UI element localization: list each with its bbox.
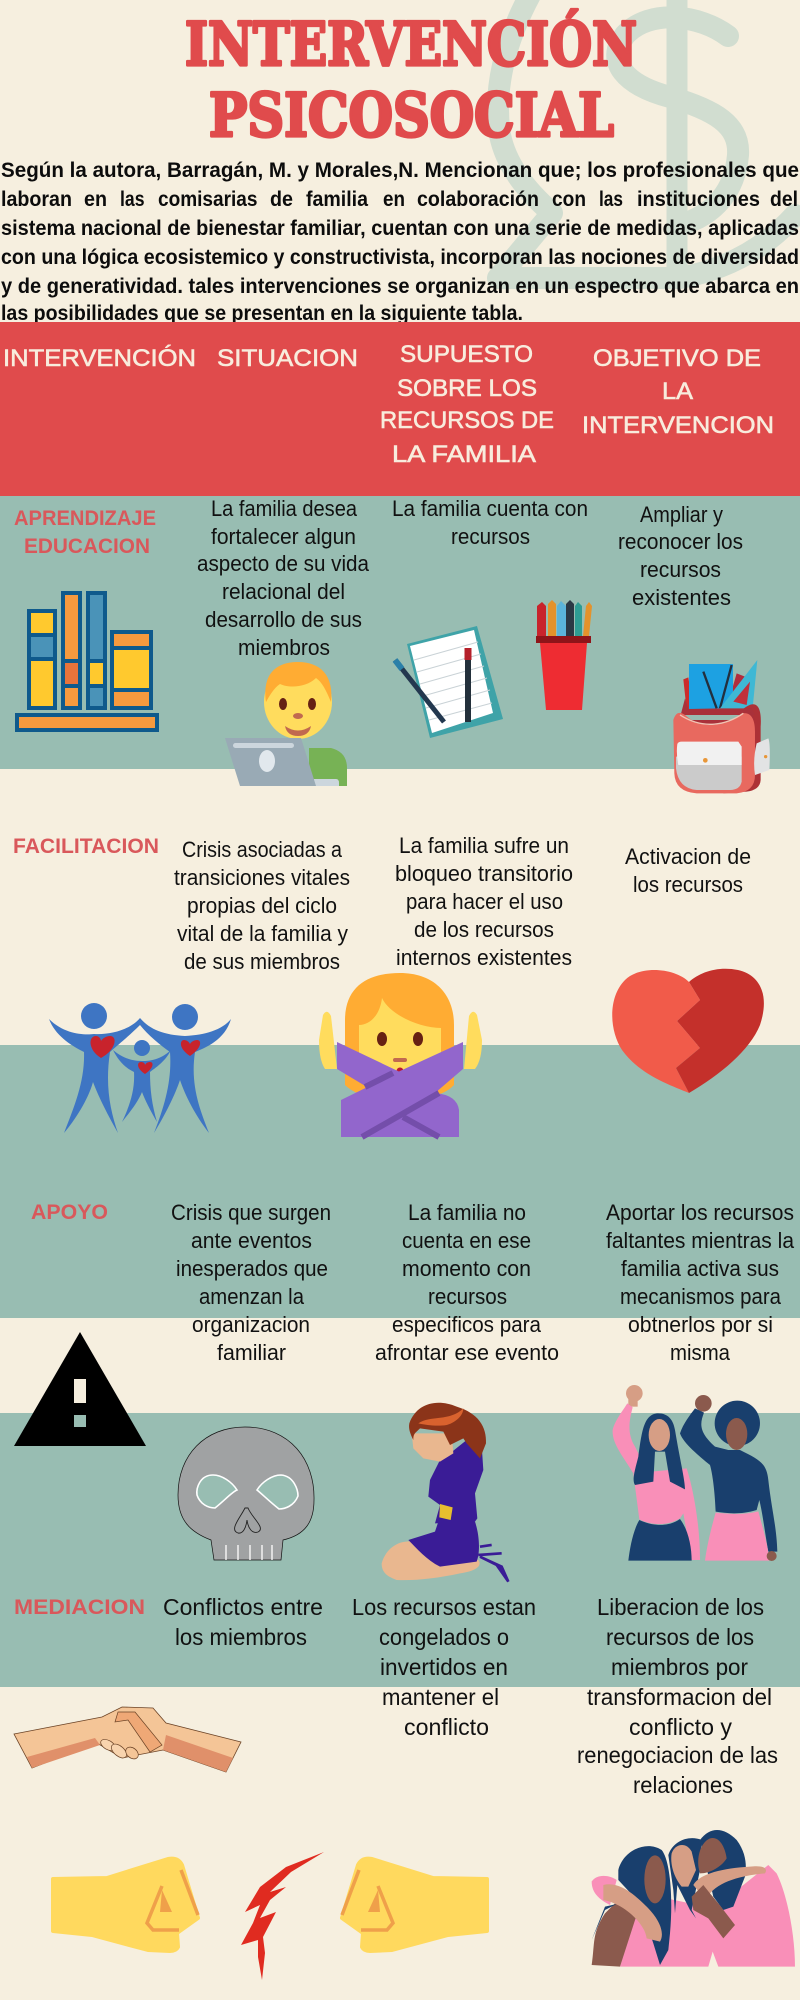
icon: women raising fists (613, 1385, 777, 1561)
icon: family with hearts (49, 1003, 231, 1133)
icon: pencil cup (536, 600, 592, 710)
text: supuesto aprendizaje: recursos (451, 524, 530, 549)
text: situacion mediacion: los miembros (175, 1624, 307, 1650)
text: supuesto mediacion: invertidos en (380, 1654, 508, 1680)
text: objetivo aprendizaje: reconocer los (618, 529, 743, 554)
icon: pale dollar sign background (498, 0, 795, 278)
text: situacion aprendizaje: aspecto de su vida (197, 551, 370, 576)
text: objetivo apoyo (606, 1200, 795, 1365)
text: situacion aprendizaje: fortalecer algun (211, 524, 356, 549)
intro paragraph: colaboración (417, 188, 539, 211)
text: situacion apoyo: ante eventos (191, 1228, 312, 1253)
panel: aprendizaje (14, 496, 770, 793)
text: objetivo facilitacion: Activacion de (625, 844, 751, 869)
text: situacion apoyo: organizacion (192, 1312, 310, 1337)
icon: warning triangle (14, 1332, 146, 1446)
text: objetivo mediacion: miembros por (611, 1654, 748, 1680)
header: situacion: SITUACION (217, 345, 358, 372)
header: objetivo: OBJETIVO DE (593, 345, 761, 372)
icon: women embracing (592, 1830, 795, 1967)
panel: mediacion (14, 1594, 795, 1980)
header: objetivo (582, 345, 774, 439)
title (185, 9, 637, 151)
text: situacion aprendizaje: miembros (238, 635, 330, 660)
text: supuesto mediacion: Los recursos estan (352, 1594, 536, 1620)
text: objetivo apoyo: mecanismos para (620, 1284, 782, 1309)
text: objetivo facilitacion (625, 844, 751, 897)
header: objetivo: LA (662, 378, 693, 405)
text: situacion facilitacion: transiciones vitales (174, 865, 350, 890)
text: objetivo apoyo: misma (670, 1340, 731, 1365)
label: aprendizaje educacion (14, 506, 156, 558)
text: supuesto mediacion: mantener el (382, 1684, 499, 1710)
header: supuesto: SUPUESTO (400, 341, 533, 368)
text: supuesto facilitacion: La familia sufre un (399, 833, 569, 858)
intro paragraph: las (599, 188, 623, 211)
text: objetivo mediacion: conflicto y (629, 1714, 733, 1740)
icon: right fist (342, 1859, 487, 1951)
text: objetivo apoyo: faltantes mientras la (606, 1228, 795, 1253)
text: objetivo mediacion: renegociacion de las (577, 1742, 778, 1768)
text: supuesto facilitacion (395, 833, 573, 970)
header: supuesto: RECURSOS DE (380, 407, 554, 434)
intro paragraph: instituciones (637, 188, 760, 211)
text: supuesto mediacion: conflicto (404, 1714, 489, 1740)
header: supuesto: LA FAMILIA (392, 441, 536, 468)
text: supuesto mediacion (352, 1594, 536, 1740)
intro paragraph: laboran (1, 188, 72, 211)
table header band (0, 322, 800, 496)
text: objetivo aprendizaje: Ampliar y (640, 502, 723, 527)
text: supuesto apoyo: afrontar ese evento (375, 1340, 559, 1365)
intro paragraph: en (383, 188, 405, 211)
icon: handshake (14, 1707, 241, 1772)
title: INTERVENCIÓN (185, 9, 637, 80)
text: supuesto facilitacion: internos existentes (396, 945, 572, 970)
text: situacion aprendizaje: relacional del (222, 579, 345, 604)
intro paragraph: con (552, 188, 586, 211)
icon: skull (178, 1427, 314, 1560)
label: facilitacion: FACILITACION (13, 834, 159, 858)
text: situacion facilitacion: vital de la familia y (177, 921, 348, 946)
text: supuesto aprendizaje (392, 496, 588, 549)
icon: broken heart (612, 969, 764, 1093)
intro paragraph: comisarias (158, 188, 258, 211)
intro paragraph: las (120, 188, 144, 211)
intro paragraph: las posibilidades que se presentan en la siguiente tabla. (1, 302, 523, 325)
icon: books on shelf (17, 593, 157, 730)
header: supuesto: SOBRE LOS (397, 375, 537, 402)
text: supuesto aprendizaje: La familia cuenta con (392, 496, 588, 521)
text: objetivo mediacion: transformacion del (587, 1684, 772, 1710)
text: situacion apoyo: familiar (217, 1340, 286, 1365)
intro paragraph: de (270, 188, 293, 211)
text: situacion aprendizaje: desarrollo de sus (205, 607, 362, 632)
text: objetivo aprendizaje: existentes (632, 585, 731, 610)
icon: woman crossing arms (319, 973, 482, 1137)
text: situacion facilitacion: propias del ciclo (187, 893, 337, 918)
text: situacion mediacion: Conflictos entre (163, 1594, 323, 1620)
text: situacion apoyo: amenzan la (199, 1284, 305, 1309)
header: objetivo: INTERVENCION (582, 412, 774, 439)
text: objetivo apoyo: familia activa sus (621, 1256, 779, 1281)
text: situacion facilitacion (174, 837, 350, 974)
text: supuesto facilitacion: bloqueo transitorio (395, 861, 573, 886)
label: aprendizaje educacion: APRENDIZAJE (14, 506, 156, 530)
text: supuesto facilitacion: para hacer el uso (406, 889, 563, 914)
header: intervención: INTERVENCIÓN (3, 345, 196, 372)
text: situacion facilitacion: de sus miembros (184, 949, 340, 974)
text: supuesto facilitacion: de los recursos (414, 917, 554, 942)
icon: lightning bolt (241, 1852, 324, 1980)
intro paragraph (1, 159, 799, 325)
text: situacion aprendizaje: La familia desea (211, 496, 358, 521)
text: objetivo mediacion: relaciones (633, 1772, 733, 1798)
text: supuesto apoyo: La familia no (408, 1200, 526, 1225)
label: apoyo: APOYO (31, 1200, 108, 1224)
text: supuesto apoyo: especificos para (392, 1312, 542, 1337)
intro paragraph: familia (306, 188, 368, 211)
text: objetivo mediacion: recursos de los (606, 1624, 754, 1650)
intro paragraph: en (84, 188, 107, 211)
text: situacion apoyo: Crisis que surgen (171, 1200, 331, 1225)
text: situacion apoyo: inesperados que (176, 1256, 328, 1281)
icon: backpack (673, 660, 770, 793)
text: objetivo mediacion: Liberacion de los (597, 1594, 764, 1620)
intro paragraph: del (770, 188, 798, 211)
text: objetivo aprendizaje (618, 502, 743, 610)
text: supuesto apoyo (375, 1200, 559, 1365)
title: PSICOSOCIAL (209, 81, 614, 151)
intro paragraph: Según la autora, Barragán, M. y Morales,N. Mencionan que; los profesionales que (1, 159, 799, 182)
header: supuesto (380, 341, 554, 468)
icon: crying woman (382, 1403, 508, 1582)
text: objetivo aprendizaje: recursos (640, 557, 721, 582)
icon: notebook and pens (395, 626, 503, 738)
text: situacion mediacion (163, 1594, 323, 1650)
panel: facilitacion (13, 833, 764, 1137)
icon: boy with laptop (225, 662, 347, 786)
text: objetivo facilitacion: los recursos (633, 872, 743, 897)
text: supuesto mediacion: congelados o (379, 1624, 509, 1650)
text: supuesto apoyo: recursos (428, 1284, 507, 1309)
panel: apoyo (14, 1200, 795, 1582)
icon: left fist (53, 1859, 198, 1951)
text: supuesto apoyo: cuenta en ese (402, 1228, 531, 1253)
text: objetivo apoyo: Aportar los recursos (606, 1200, 794, 1225)
text: objetivo mediacion (577, 1594, 778, 1798)
label: aprendizaje educacion: EDUCACION (24, 534, 150, 558)
text: situacion aprendizaje (197, 496, 370, 660)
text: situacion facilitacion: Crisis asociadas a (182, 837, 343, 862)
text: supuesto apoyo: momento con (402, 1256, 531, 1281)
text: objetivo apoyo: obtnerlos por si (628, 1312, 773, 1337)
text: situacion apoyo (171, 1200, 331, 1365)
label: mediacion: MEDIACION (14, 1595, 145, 1619)
